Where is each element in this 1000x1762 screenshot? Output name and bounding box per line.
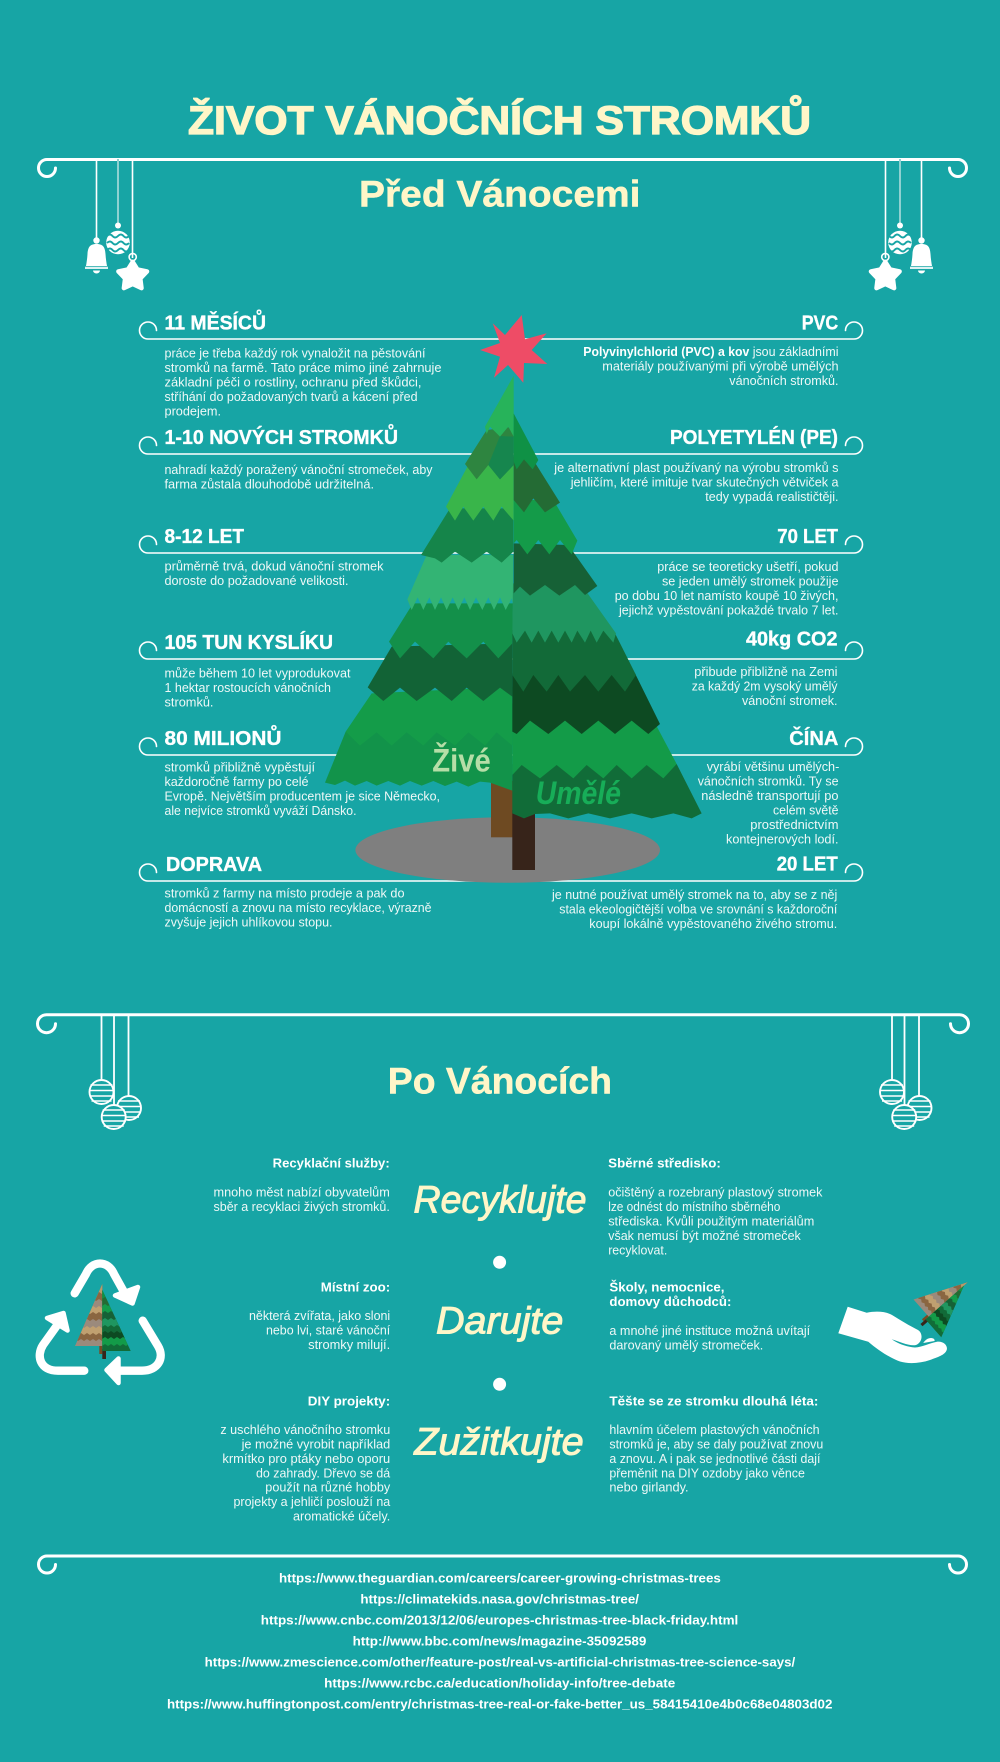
bottom divider xyxy=(38,1556,966,1573)
trunk: live tree xyxy=(491,781,512,837)
block: enjoy the tree for years: přeměnit na DIY ozdoby jako věnce xyxy=(609,1466,805,1480)
block: DIY projects: DIY projekty: xyxy=(308,1393,390,1408)
fact: 80 million: stromků přibližně vypěstují xyxy=(164,761,315,775)
fact: 11 months: 11 MĚSÍCŮ xyxy=(164,308,266,334)
block: schools and hospitals: domovy důchodců: xyxy=(609,1294,731,1309)
block: collection centre: však nemusí být možné stromeček xyxy=(608,1229,801,1243)
top divider xyxy=(38,160,966,176)
fact: 20 years: 20 LET xyxy=(777,854,838,876)
fact: 8-12 years: 8-12 LET xyxy=(164,526,244,548)
heading: recycle: Recyklujte xyxy=(414,1180,586,1222)
fact: 80 million: ale nejvíce stromků vyváží Dánsko. xyxy=(164,804,356,818)
block: DIY projects: do zahrady. Dřevo se dá xyxy=(256,1466,391,1480)
title: ŽIVOT VÁNOČNÍCH STROMKŮ xyxy=(188,94,811,143)
block: collection centre: recyklovat. xyxy=(608,1244,667,1258)
block: DIY projects: projekty a jehličí poslouží na xyxy=(234,1495,391,1509)
heading: after christmas: Po Vánocích xyxy=(388,1060,612,1101)
block: collection centre xyxy=(608,1156,823,1258)
fact: China: kontejnerových lodí. xyxy=(726,832,838,846)
block: schools and hospitals: Školy, nemocnice, xyxy=(609,1279,724,1294)
fact: 105 tons of oxygen xyxy=(164,631,351,709)
block: collection centre: očištěný a rozebraný plastový stromek xyxy=(608,1186,823,1200)
icon: striped baubles left xyxy=(90,1015,141,1129)
fact: 40 kg CO2: za každý 2m vysoký umělý xyxy=(692,680,838,694)
fact: China xyxy=(698,726,839,846)
block: recycling services xyxy=(214,1156,390,1214)
block: schools and hospitals xyxy=(609,1279,811,1352)
fact: 8-12 years xyxy=(164,526,384,588)
ground shadow xyxy=(355,817,660,883)
fact: 80 million: Evropě. Největším producentem je sice Německo, xyxy=(164,790,440,804)
fact: PVC: vánočních stromků. xyxy=(729,374,838,388)
fact: 105 tons of oxygen: může během 10 let vyprodukovat xyxy=(164,666,351,680)
fact: 70 years: jejichž vypěstování pokaždé trvalo 7 let. xyxy=(618,604,838,618)
block: local zoo: některá zvířata, jako sloni xyxy=(249,1309,390,1323)
block: DIY projects: použít na různé hobby xyxy=(265,1481,391,1495)
block: enjoy the tree for years xyxy=(609,1393,823,1495)
icon: hanging ornaments right xyxy=(871,159,933,288)
block: local zoo: nebo lvi, staré vánoční xyxy=(266,1323,391,1337)
source list: https://www.zmescience.com/other/feature-post/real-vs-artificial-christmas-tree-science-says/ xyxy=(205,1655,796,1670)
fact: 70 years: 70 LET xyxy=(777,526,838,548)
block: schools and hospitals: darovaný umělý stromeček. xyxy=(609,1338,763,1352)
middle divider xyxy=(38,1015,968,1033)
fact: China: celém světě xyxy=(773,804,838,818)
fact: 70 years: se jeden umělý stromek použije xyxy=(662,574,838,588)
panel: before christmas xyxy=(38,159,966,931)
block: local zoo: Místní zoo: xyxy=(321,1279,390,1294)
block: enjoy the tree for years: a znovu. A i pak se jednotlivé části dají xyxy=(609,1452,821,1466)
heading: before christmas: Před Vánocemi xyxy=(359,174,640,215)
fact: 11 months: prodejem. xyxy=(164,404,221,418)
fact: 1-10 new trees: 1-10 NOVÝCH STROMKŮ xyxy=(164,423,398,449)
block: DIY projects: je možné vyrobit například xyxy=(241,1437,390,1451)
fact: PVC xyxy=(583,312,838,388)
block: schools and hospitals: a mnohé jiné instituce možná uvítají xyxy=(609,1324,811,1338)
block: collection centre: Sběrné středisko: xyxy=(608,1156,721,1171)
fact: 80 million xyxy=(164,724,440,818)
fact: 70 years: práce se teoreticky ušetří, pokud xyxy=(657,560,838,574)
block: recycling services: sběr a recyklaci živých stromků. xyxy=(214,1200,390,1214)
fact: 11 months xyxy=(164,308,442,418)
fact: PVC: materiály používanými při výrobě umělých xyxy=(602,360,838,374)
fact: 80 million: 80 MILIONŮ xyxy=(164,724,282,750)
fact: polyethylene: tedy vypadá realističtěji. xyxy=(705,490,838,504)
tree layers xyxy=(325,376,702,818)
fact: transport: DOPRAVA xyxy=(166,854,262,876)
fact: polyethylene: POLYETYLÉN (PE) xyxy=(670,426,838,449)
panel: after christmas xyxy=(38,1015,993,1523)
block: enjoy the tree for years: nebo girlandy. xyxy=(609,1481,689,1495)
fact: China: vyrábí většinu umělých- xyxy=(707,760,839,774)
illustration: christmas tree xyxy=(325,315,702,883)
tree star xyxy=(480,315,547,383)
icon: striped baubles right xyxy=(880,1015,932,1129)
fact: 8-12 years: doroste do požadované velikosti. xyxy=(164,574,348,588)
fact: 105 tons of oxygen: stromků. xyxy=(164,695,214,709)
fact: 20 years xyxy=(551,854,838,931)
block: local zoo xyxy=(249,1279,391,1352)
fact: PVC: PVC xyxy=(802,312,838,334)
fact: 1-10 new trees: nahradí každý poražený vánoční stromeček, aby xyxy=(164,463,433,477)
fact: 40 kg CO2: přibude přibližně na Zemi xyxy=(694,665,838,679)
fact: China: následně transportují po xyxy=(701,789,838,803)
block: DIY projects: aromatické účely. xyxy=(293,1509,390,1523)
fact: 20 years: koupí lokálně vypěstovaného živého stromu. xyxy=(589,917,837,931)
fact: 20 years: stala ekeologičtější volba ve srovnání s každoroční xyxy=(559,902,838,916)
separator dot xyxy=(493,1256,506,1269)
block: enjoy the tree for years: Těšte se ze stromku dlouhá léta: xyxy=(609,1393,818,1408)
fact: China: prostřednictvím xyxy=(750,818,838,832)
fact: China: ČÍNA xyxy=(789,726,838,750)
fact: 40 kg CO2: 40kg CO2 xyxy=(746,629,838,651)
fact: transport: zvyšuje jejich uhlíkovou stopu. xyxy=(164,916,332,930)
fact: 1-10 new trees: farma zůstala dlouhodobě udržitelná. xyxy=(164,478,374,492)
source list: https://www.huffingtonpost.com/entry/christmas-tree-real-or-fake-better_us_58415410e4b0c68e04803d02 xyxy=(167,1697,832,1712)
separator dot xyxy=(493,1378,506,1391)
fact: 1-10 new trees xyxy=(164,423,433,492)
heading: donate: Darujte xyxy=(436,1300,563,1342)
fact: 8-12 years: průměrně trvá, dokud vánoční stromek xyxy=(164,560,384,574)
timeline rules xyxy=(140,322,862,881)
source list: https://www.theguardian.com/careers/career-growing-christmas-trees xyxy=(279,1571,721,1586)
icon: hanging ornaments left xyxy=(85,159,147,288)
icon: recycling arrows with tree xyxy=(40,1264,161,1383)
fact: 11 months: základní péči o rostliny, ochranu před škůdci, xyxy=(164,376,422,390)
fact: polyethylene xyxy=(553,426,839,504)
fact: transport xyxy=(164,854,432,930)
source list: http://www.bbc.com/news/magazine-35092589 xyxy=(353,1634,646,1649)
source list: https://climatekids.nasa.gov/christmas-tree/ xyxy=(360,1592,639,1607)
fact: China: vánočních stromků. Ty se xyxy=(698,774,838,788)
block: recycling services: mnoho měst nabízí obyvatelům xyxy=(214,1186,390,1200)
fact: transport: domácností a znovu na místo recyklace, výrazně xyxy=(164,901,432,915)
fact: transport: stromků z farmy na místo prodeje a pak do xyxy=(164,887,404,901)
fact: 80 million: každoročně farmy po celé xyxy=(164,775,308,789)
fact: polyethylene: je alternativní plast používaný na výrobu stromků s xyxy=(553,461,838,475)
block: enjoy the tree for years: hlavním účelem plastových vánočních xyxy=(609,1423,820,1437)
source list: https://www.cnbc.com/2013/12/06/europes-christmas-tree-black-friday.html xyxy=(261,1613,738,1628)
heading: reuse: Zužitkujte xyxy=(413,1421,584,1463)
fact: 20 years: je nutné používat umělý stromek na to, aby se z něj xyxy=(551,888,837,902)
fact: 105 tons of oxygen: 105 TUN KYSLÍKU xyxy=(164,631,333,654)
fact: 11 months: stříhání do požadovaných tvarů a kácení před xyxy=(164,390,418,404)
fact: 40 kg CO2 xyxy=(692,629,838,708)
fact: 11 months: práce je třeba každý rok vynaložit na pěstování xyxy=(164,346,426,360)
fact: PVC: Polyvinylchlorid (PVC) a kov xyxy=(583,345,749,359)
fact: 11 months: stromků na farmě. Tato práce mimo jiné zahrnuje xyxy=(164,361,442,375)
block: recycling services: Recyklační služby: xyxy=(273,1156,390,1171)
block: local zoo: stromky milují. xyxy=(308,1338,390,1352)
block: DIY projects: z uschlého vánočního stromku xyxy=(220,1423,390,1437)
fact: 70 years: po dobu 10 let namísto koupě 10 živých, xyxy=(615,589,838,603)
fact: 40 kg CO2: vánoční stromek. xyxy=(742,694,838,708)
source list xyxy=(167,1571,832,1712)
block: DIY projects xyxy=(220,1393,391,1523)
icon: hand holding tree xyxy=(838,1255,993,1363)
block: DIY projects: krmítko pro ptáky nebo oporu xyxy=(222,1452,390,1466)
block: collection centre: střediska. Kvůli použitým materiálům xyxy=(608,1214,814,1228)
panel: sources xyxy=(38,1556,966,1712)
fact: 105 tons of oxygen: 1 hektar rostoucích vánočních xyxy=(164,681,331,695)
block: collection centre: lze odnést do místního sběrného xyxy=(608,1200,780,1214)
block: enjoy the tree for years: stromků je, aby se daly používat znovu xyxy=(609,1437,823,1451)
trunk: artificial tree xyxy=(512,810,535,870)
fact: polyethylene: jehličím, které imituje tvar skutečných větviček a xyxy=(570,476,839,490)
fact: PVC: jsou základními xyxy=(752,345,838,359)
fact: 70 years xyxy=(615,526,838,618)
label: live: Živé xyxy=(432,743,491,779)
source list: https://www.rcbc.ca/education/holiday-info/tree-debate xyxy=(324,1676,675,1691)
label: artificial: Umělé xyxy=(536,775,621,811)
